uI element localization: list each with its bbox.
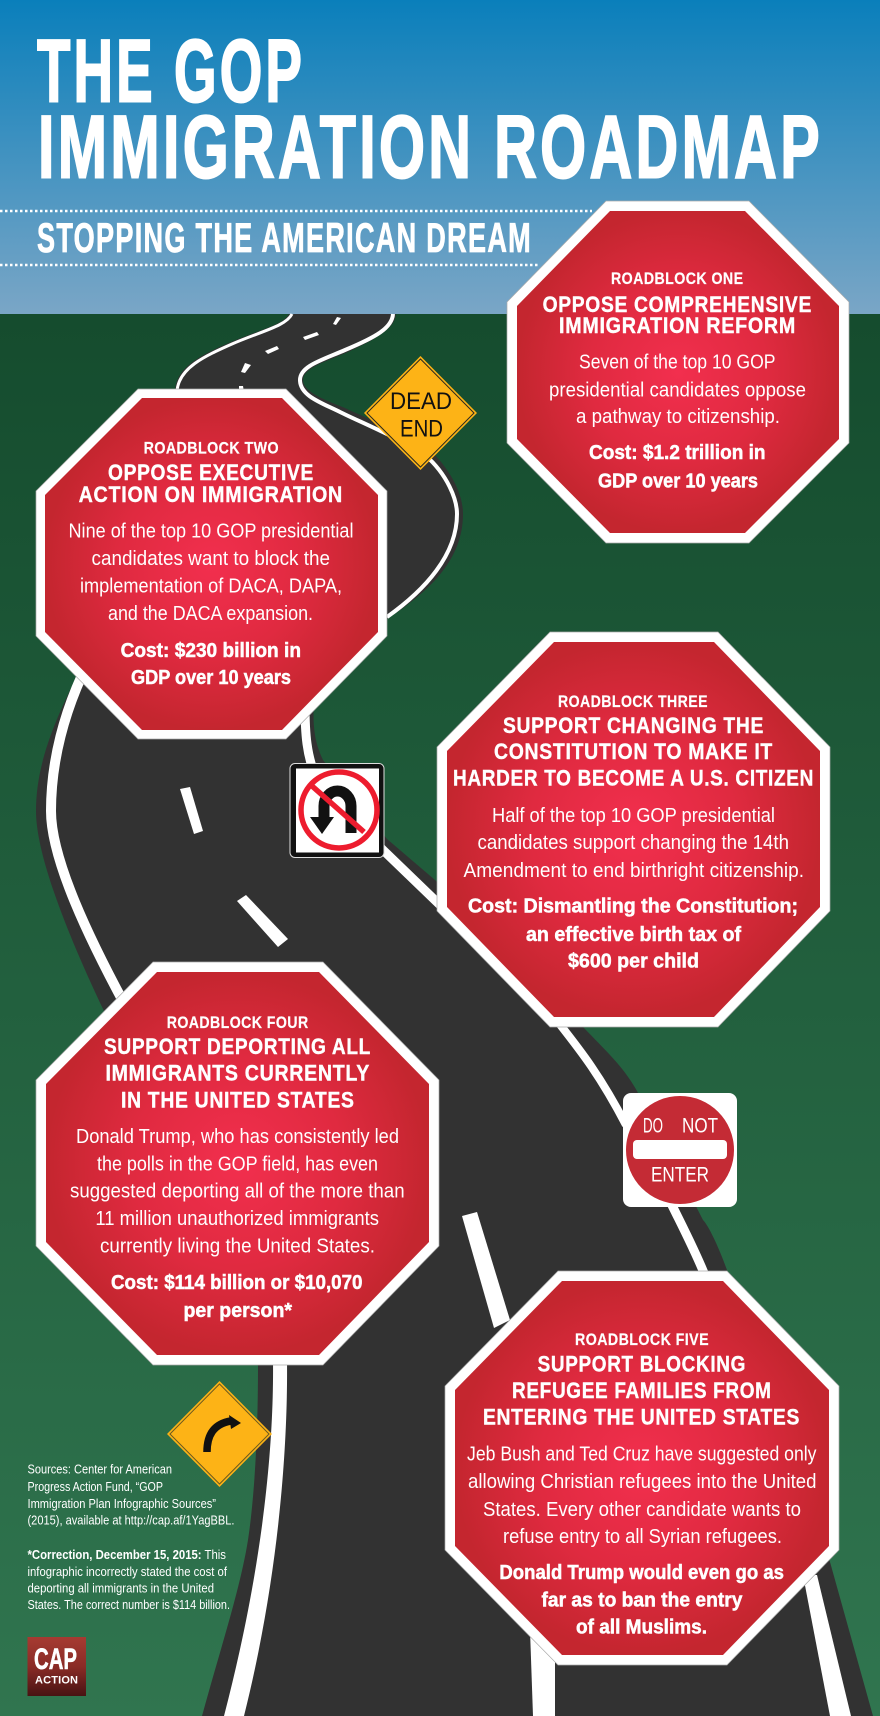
panel: roadblock one: Seven of the top 10 GOP [579, 352, 776, 374]
panel: roadblock one: ROADBLOCK ONE [611, 270, 744, 288]
panel: roadblock three: $600 per child [568, 951, 699, 973]
panel: roadblock one: OPPOSE COMPREHENSIVE [543, 292, 812, 317]
panel: roadblock five: SUPPORT BLOCKING [538, 1352, 746, 1376]
panel: roadblock one: IMMIGRATION REFORM [559, 313, 796, 338]
panel: roadblock five [445, 1271, 839, 1665]
panel: roadblock five: Donald Trump would even go as [499, 1562, 784, 1584]
panel: roadblock three [437, 632, 830, 1027]
icon: do not enter sign [623, 1093, 737, 1207]
panel: roadblock four: IN THE UNITED STATES [121, 1088, 355, 1112]
panel: roadblock two [36, 389, 387, 739]
panel: roadblock three: Half of the top 10 GOP presidential [492, 805, 775, 827]
panel: roadblock one: a pathway to citizenship. [576, 406, 780, 428]
sources text [28, 1463, 234, 1528]
icon: do not enter sign: DO [643, 1115, 663, 1138]
panel: roadblock two: OPPOSE EXECUTIVE [108, 460, 314, 485]
correction note: deporting all immigrants in the United [28, 1582, 214, 1596]
panel: roadblock four [36, 962, 439, 1365]
icon: dead end sign [364, 356, 477, 470]
subtitle band: STOPPING THE AMERICAN DREAM [37, 214, 532, 261]
panel: roadblock five: REFUGEE FAMILIES FROM [512, 1378, 772, 1403]
panel: roadblock three: HARDER TO BECOME A U.S. CITIZEN [453, 766, 814, 791]
panel: roadblock two: ACTION ON IMMIGRATION [79, 482, 343, 507]
panel: roadblock three: Amendment to end birthright citizenship. [464, 860, 804, 882]
sources text: Sources: Center for American [28, 1463, 172, 1477]
panel: roadblock two: GDP over 10 years [131, 667, 291, 689]
correction note: *Correction, December 15, 2015: This [28, 1548, 226, 1562]
panel: roadblock five: allowing Christian refugees into the United [468, 1471, 816, 1493]
panel: roadblock one: presidential candidates oppose [549, 379, 806, 401]
panel: roadblock five: States. Every other candidate wants to [483, 1499, 801, 1521]
title [37, 20, 823, 196]
panel: roadblock one: Cost: $1.2 trillion in [589, 442, 766, 464]
panel: roadblock five: of all Muslims. [576, 1616, 707, 1638]
panel: roadblock five: ROADBLOCK FIVE [575, 1331, 709, 1349]
panel: roadblock two: Nine of the top 10 GOP presidential [68, 520, 354, 542]
sources text: Immigration Plan Infographic Sources” [28, 1497, 216, 1511]
panel: roadblock five: ENTERING THE UNITED STATES [483, 1405, 800, 1430]
panel: roadblock four: the polls in the GOP field, has even [97, 1154, 378, 1176]
correction note: infographic incorrectly stated the cost of [28, 1565, 227, 1579]
panel: roadblock four: per person* [184, 1300, 292, 1322]
sources text: (2015), available at http://cap.af/1YagBBL. [28, 1514, 234, 1528]
logo: CAP Action: ACTION [35, 1674, 78, 1686]
panel: roadblock four: 11 million unauthorized immigrants [95, 1208, 379, 1230]
panel: roadblock four: Donald Trump, who has consistently led [76, 1126, 399, 1148]
panel: roadblock four: Cost: $114 billion or $10,070 [111, 1272, 362, 1294]
icon: dead end sign: END [400, 416, 443, 442]
panel: roadblock five: Jeb Bush and Ted Cruz have suggested only [467, 1444, 816, 1466]
logo: CAP Action [28, 1637, 86, 1696]
icon: right curve sign [167, 1381, 272, 1487]
panel: roadblock four: currently living the United States. [100, 1235, 375, 1257]
logo: CAP Action: CAP [34, 1643, 77, 1676]
panel: roadblock four: SUPPORT DEPORTING ALL [104, 1034, 371, 1059]
panel: roadblock four: IMMIGRANTS CURRENTLY [106, 1060, 370, 1086]
icon: do not enter sign: ENTER [651, 1164, 709, 1187]
panel: roadblock five: refuse entry to all Syrian refugees. [503, 1526, 782, 1548]
panel: roadblock three: Cost: Dismantling the Constitution; [468, 896, 798, 918]
icon: dead end sign: DEAD [390, 388, 452, 415]
panel: roadblock three: an effective birth tax of [526, 924, 741, 946]
panel: roadblock two: candidates want to block the [92, 548, 330, 570]
panel: roadblock three: ROADBLOCK THREE [558, 693, 708, 711]
panel: roadblock one: GDP over 10 years [598, 470, 758, 492]
title: THE GOP [37, 20, 305, 120]
panel: roadblock five: far as to ban the entry [542, 1590, 743, 1612]
panel: roadblock two: Cost: $230 billion in [121, 640, 301, 662]
panel: roadblock one [507, 201, 849, 543]
winding road [36, 314, 873, 1716]
panel: roadblock two: implementation of DACA, DAPA, [80, 576, 342, 598]
correction note: States. The correct number is $114 billion. [28, 1598, 230, 1612]
panel: roadblock three: SUPPORT CHANGING THE [503, 713, 764, 738]
panel: roadblock four: suggested deporting all of the more than [70, 1181, 405, 1203]
icon: no u-turn sign [290, 764, 384, 858]
panel: roadblock three: CONSTITUTION TO MAKE IT [494, 739, 773, 764]
panel: roadblock four: ROADBLOCK FOUR [167, 1014, 309, 1032]
correction note [28, 1548, 230, 1612]
icon: do not enter sign: NOT [682, 1115, 718, 1138]
panel: roadblock three: candidates support changing the 14th [478, 832, 789, 854]
sources text: Progress Action Fund, “GOP [28, 1480, 163, 1494]
panel: roadblock two: and the DACA expansion. [108, 603, 313, 625]
panel: roadblock two: ROADBLOCK TWO [144, 440, 279, 458]
sky background [0, 0, 880, 314]
